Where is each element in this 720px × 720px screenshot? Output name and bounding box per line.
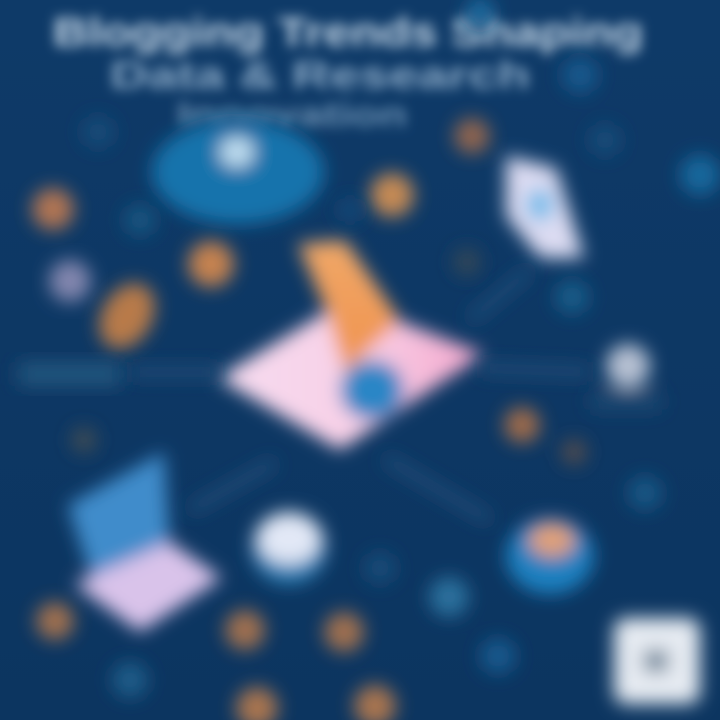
title: Blogging Trends Shaping bbox=[53, 9, 643, 55]
title bbox=[53, 9, 643, 134]
icon: pale dot right bbox=[590, 344, 662, 410]
title: Innovation bbox=[177, 96, 407, 134]
icon: blue circle on platform bbox=[340, 360, 404, 420]
title: Data & Research bbox=[110, 55, 530, 97]
icon: pale dot left bbox=[49, 260, 91, 302]
icon: cloud disc bbox=[152, 120, 324, 224]
label: left bbox=[18, 362, 122, 386]
central isometric platform bbox=[218, 240, 484, 450]
icon: orange cone bbox=[298, 240, 400, 372]
orange dots bbox=[32, 118, 587, 720]
icon: orange-blue bowl bbox=[506, 518, 594, 594]
connector lines bbox=[130, 270, 590, 520]
icon: QR badge bottom right bbox=[614, 618, 700, 704]
icon: white-blue bubble bbox=[251, 512, 327, 584]
icon: phone card top right bbox=[506, 156, 584, 258]
icon: laptop bbox=[68, 452, 222, 632]
